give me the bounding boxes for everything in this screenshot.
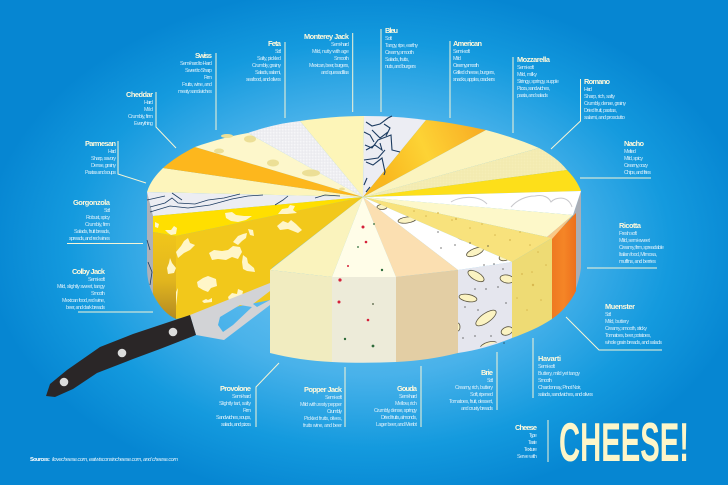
label: Nacho: Nacho [624, 139, 644, 148]
rim: grey right edge [573, 191, 581, 291]
label: Parmesan: Pastas and soups [85, 170, 116, 176]
label: Havarti: salads, sandwiches, and olives [538, 392, 593, 398]
label: Gouda: Semi-hard [399, 394, 417, 400]
top: gorgonzola [147, 192, 363, 216]
label: Ricotta: Italian food, Mimosa, [619, 252, 657, 258]
label: Brie [449, 352, 497, 412]
label: Parmesan: Hard [108, 149, 116, 155]
label: American: Grilled cheese, burgers, [453, 70, 495, 76]
top: swiss [195, 133, 363, 197]
label: Mozzarella: Semi-soft [517, 65, 535, 71]
label: Popper Jack [300, 367, 345, 429]
swiss holes [214, 134, 345, 190]
label: Ricotta: Ricotta [619, 221, 642, 230]
label: Feta: Soft [275, 49, 282, 55]
label: Bleu: Tangy, ripe, earthy [385, 43, 418, 49]
label: Provolone: salads, and pizza [221, 422, 251, 428]
legend: cheese key [515, 420, 548, 462]
label: Brie: Soft [487, 378, 494, 384]
label: American: American [453, 39, 482, 48]
label: Provolone [216, 363, 279, 428]
knife [46, 283, 270, 397]
label: Havarti: Chardonnay, Pinot Noir, [538, 385, 581, 391]
label: Swiss: Firm [204, 75, 213, 81]
side: left facet [153, 232, 176, 319]
label: Ricotta: Mild, semi-sweet [619, 238, 651, 244]
gorgonzola veins [147, 193, 340, 285]
label: Romano: Sharp, rich, salty [584, 94, 615, 100]
top: nacho yellow [363, 170, 581, 197]
label: Swiss: Semi-hard to Hard [180, 61, 212, 67]
label: Mozzarella: Pizza, sandwiches, [517, 86, 550, 92]
label: Mozzarella: Stringy, springy, supple [517, 79, 559, 85]
label: Ricotta [587, 221, 664, 268]
brie top rind spots [377, 204, 512, 262]
top: mozzarella [363, 130, 539, 197]
top: gouda [363, 197, 458, 277]
label: American: Semi-soft [453, 49, 471, 55]
top: white wedge with clouds [363, 191, 581, 215]
label: Popper Jack: fruits wine, and beer [303, 423, 342, 429]
label: Provolone: Semi-hard [232, 394, 251, 400]
label: Parmesan: Dense, grainy [91, 163, 116, 169]
label: Romano: Hard [584, 87, 592, 93]
label: Swiss: Sweet to Sharp [185, 68, 212, 74]
label: Romano: Romano [584, 77, 610, 86]
label: Mozzarella: Mozzarella [517, 55, 551, 64]
label: Brie: and crusty breads [461, 406, 493, 412]
knife rivets [60, 328, 177, 386]
label: Colby Jack: Mexican food, red wine, [62, 298, 105, 304]
label: Cheddar: Cheddar [126, 90, 153, 99]
label: Romano: Crumbly, dense, grainy [584, 101, 626, 107]
label: Monterey Jack: and quesadillas [321, 70, 349, 76]
label: Gorgonzola: Robust, spicy [86, 215, 110, 221]
top: cheddar [163, 147, 363, 197]
label: Swiss: Swiss [195, 51, 212, 60]
label: Havarti: Smooth [538, 378, 552, 384]
top: parmesan [147, 168, 363, 197]
rim: peach strip [547, 214, 574, 239]
label: Gorgonzola: Gorgonzola [73, 198, 111, 207]
top: provolone [270, 197, 363, 277]
label: Provolone: Firm [243, 408, 252, 414]
top: ricotta [363, 197, 573, 237]
top: american [363, 120, 486, 197]
label: Colby Jack: beer, and dark breads [66, 305, 105, 311]
cheese wheel [147, 116, 581, 363]
label: Brie: Tomatoes, fruit, dessert, [449, 399, 493, 405]
label: American: Creamy, smooth [453, 63, 479, 69]
label: Gouda: Gouda [397, 384, 418, 393]
label: Brie: Brie [481, 368, 493, 377]
label: Monterey Jack: Mild, nutty with age [312, 49, 349, 55]
label: Gouda [374, 366, 421, 428]
label: Swiss: meaty sandwiches [178, 89, 212, 95]
label: American: snacks, apples, crackers [453, 77, 495, 83]
label: Popper Jack: Pickled fruits, olives, [304, 416, 342, 422]
label: Nacho: Melted [624, 149, 636, 155]
popper jack flecks [338, 223, 383, 347]
label: Feta: Feta [268, 39, 282, 48]
label: Monterey Jack [304, 32, 353, 112]
label: Monterey Jack: Semi-hard [331, 42, 349, 48]
label: Feta: Crumbly, grainy [252, 63, 281, 69]
label: Muenster: Muenster [605, 302, 635, 311]
label: Muenster: Creamy, smooth, sticky [605, 326, 647, 332]
label: Muenster [566, 302, 662, 350]
label: Ricotta: Creamy, firm, spreadable [619, 245, 664, 251]
label: Mozzarella: Mild, milky [517, 72, 537, 78]
side: orange cheese [552, 213, 576, 319]
side: popper jack [332, 277, 396, 363]
bleu veins [364, 116, 400, 192]
top: monterey jack [300, 116, 364, 197]
side: brie [458, 262, 512, 353]
top: feta [248, 121, 363, 197]
brie side rind spots [458, 270, 512, 347]
label: Brie: Creamy, rich, buttery [455, 385, 493, 391]
label: Muenster: whole grain breads, and salads [605, 340, 662, 346]
label: Popper Jack: Mild with zesty pepper [300, 402, 342, 408]
label: Havarti: Semi-soft [538, 364, 556, 370]
top: bright yellow wedge [153, 197, 363, 236]
label: American [450, 39, 495, 118]
top: brie [363, 197, 512, 270]
label: Provolone: Sandwiches, soups, [216, 415, 251, 421]
label: Bleu [381, 26, 418, 112]
side: provolone [270, 270, 332, 362]
label: Monterey Jack: Mexican, beer, burgers, [309, 63, 349, 69]
knife handle [46, 315, 196, 397]
top: bleu [363, 116, 426, 197]
side: colby jack [176, 197, 363, 319]
top: romano [363, 148, 567, 197]
label: Colby Jack: Mild, slightly sweet, tangy [57, 284, 105, 290]
label: Gorgonzola: Soft [104, 208, 111, 214]
label: Popper Jack: Popper Jack [304, 385, 343, 394]
label: Bleu: Salads, fruits, [385, 57, 409, 63]
label: Havarti [533, 338, 593, 398]
label: Bleu: Soft [385, 36, 393, 42]
label: Gouda: Mellow, rich [395, 401, 417, 407]
label: Brie: Soft, ripened [470, 392, 493, 398]
label: Colby Jack: Colby Jack [72, 267, 106, 276]
label: Nacho: Mild, spicy [624, 156, 643, 162]
label: Gorgonzola [67, 198, 143, 244]
label: Havarti: Buttery, mild yet tangy [538, 371, 580, 377]
label: Gouda: Crumbly, dense, springy [374, 408, 417, 414]
label: Gorgonzola: Salads, fruit breads, [74, 229, 110, 235]
label: Nacho: Chips, and fries [624, 170, 651, 176]
label: Muenster: Mild, buttery [605, 319, 629, 325]
label: Ricotta: Fresh soft [619, 231, 638, 237]
speckled yellow dots [413, 210, 547, 311]
label: Colby Jack: Semi-soft [88, 277, 106, 283]
label: Feta [246, 39, 285, 118]
label: Provolone: Provolone [220, 384, 251, 393]
label: Cheddar: Hard [144, 100, 153, 106]
label: Gouda: Lager beer, and Merlot [376, 422, 418, 428]
colby jack blobs [155, 205, 302, 308]
label: Muenster: Soft [605, 312, 612, 318]
label: Bleu: Bleu [385, 26, 398, 35]
legend: cheese key: Type [529, 433, 537, 439]
label: Swiss: Fruits, wine, and [182, 82, 212, 88]
rim: grey left edge [147, 192, 153, 294]
label: Gouda: Dried fruits, almonds, [381, 415, 417, 421]
top: popper jack [332, 197, 396, 277]
brie pepper dots [437, 231, 507, 344]
label: Feta: Salads, salami, [255, 70, 281, 76]
label: Popper Jack: Crumbly [327, 409, 342, 415]
label: Swiss [178, 51, 216, 130]
sources: ilovecheese.com, eatwisconsincheese.com, and cheese.com [52, 457, 178, 463]
label: American: Mild [453, 56, 461, 62]
label: Muenster: Tomatoes, beer, potatoes, [605, 333, 651, 339]
label: Parmesan: Sharp, savory [91, 156, 116, 162]
label: Gorgonzola: spreads, and red wines [69, 236, 110, 242]
label: Popper Jack: Semi-soft [325, 395, 343, 401]
label: Gorgonzola: Crumbly, firm [85, 222, 111, 228]
legend: cheese key: Cheese [515, 423, 537, 432]
label: Colby Jack: Smooth [91, 291, 105, 297]
label: Monterey Jack: Smooth [334, 56, 349, 62]
label: Cheddar: Crumbly, firm [128, 114, 154, 120]
label: Romano: salami, and prosciutto [584, 115, 625, 121]
label: Bleu: Creamy, smooth [385, 50, 414, 56]
label: Parmesan: Parmesan [85, 139, 116, 148]
label: Colby Jack [57, 267, 153, 312]
label: Feta: seafood, and olives [246, 77, 281, 83]
label: Monterey Jack: Monterey Jack [304, 32, 350, 41]
side: gouda [396, 270, 458, 362]
sources: Sources: [30, 457, 50, 463]
label: Nacho [580, 139, 651, 178]
label: Cheddar: Mild [144, 107, 153, 113]
label: Provolone: Slightly tart, salty [219, 401, 251, 407]
label: Romano [551, 77, 626, 149]
side: yellow speckled cheese [512, 238, 552, 338]
label: Cheddar: Everything [134, 121, 153, 127]
top: yellow speckled [363, 197, 552, 262]
label: Cheddar [126, 90, 176, 148]
label: Ricotta: muffins, and berries [619, 259, 656, 265]
legend: cheese key: Serve with [517, 454, 537, 460]
label: Mozzarella [513, 55, 559, 133]
nacho cloud outlines [451, 195, 572, 207]
legend: cheese key: Texture [524, 447, 537, 453]
knife blade [190, 283, 270, 340]
label: Romano: Dried fruit, pastas, [584, 108, 617, 114]
label: Nacho: Creamy, oozy [624, 163, 648, 169]
label: Parmesan [85, 139, 146, 183]
legend: cheese key: Taste [528, 440, 537, 446]
label: Havarti: Havarti [538, 354, 561, 363]
label: Mozzarella: pasta, and salads [517, 93, 548, 99]
label: Bleu: nuts, and burgers [385, 64, 416, 70]
label: Feta: Salty, pickled [257, 56, 281, 62]
